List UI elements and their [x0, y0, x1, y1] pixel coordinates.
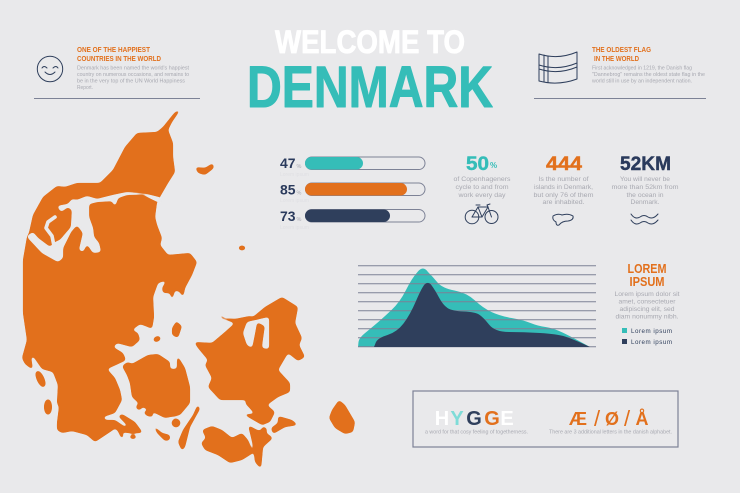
Anholt	[238, 246, 246, 250]
icon: island	[553, 214, 573, 225]
caption: hygge: a word for that cosy feeling of togetherness.	[425, 430, 528, 436]
number: 444: 444	[546, 154, 582, 175]
danish letters: Å	[636, 409, 648, 429]
bar: 47 percent	[280, 155, 425, 178]
word: hygge: Y	[450, 408, 464, 430]
heading: oldest flag: THE OLDEST FLAG	[592, 45, 651, 54]
progress bars	[280, 155, 425, 231]
Mon	[271, 416, 298, 434]
heading: oldest flag: IN THE WORLD	[594, 54, 639, 63]
panel: happiest countries	[34, 45, 200, 98]
stat: islands	[534, 154, 594, 225]
bar: 85 percent: 85	[280, 182, 296, 198]
panel: oldest flag	[534, 45, 706, 98]
small island Lyo	[129, 435, 137, 439]
navy area	[374, 283, 590, 347]
text block: lorem ipsum: adipiscing elit, sed	[620, 306, 675, 313]
title line: welcome to: WELCOME TO	[275, 24, 465, 60]
teal area	[358, 268, 590, 347]
danish letters: Ø	[605, 409, 619, 429]
heading: happiest countries: ONE OF THE HAPPIEST	[77, 45, 150, 54]
Limfjord branch	[46, 217, 55, 246]
icon: danish flag	[539, 52, 577, 83]
text block: islands: are inhabited.	[542, 199, 585, 206]
text block: happiest countries: Report.	[77, 85, 93, 91]
text block: cyclists: work every day	[457, 192, 507, 199]
danish letters: /	[594, 406, 601, 431]
Falster	[248, 425, 273, 469]
small island Taasinge	[172, 418, 180, 428]
landmass shapes	[22, 109, 355, 469]
chart legend panel	[614, 261, 680, 346]
Fano	[33, 369, 48, 389]
bar: 85 percent: Lorem ipsum	[280, 198, 309, 204]
bar: 73 percent: %	[296, 217, 302, 223]
danish letters: Æ	[569, 409, 587, 429]
text block: cyclists: of Copenhageners	[454, 176, 510, 183]
heading: happiest countries: COUNTRIES IN THE WORLD	[77, 54, 161, 63]
Samso	[172, 313, 182, 338]
text block: lorem ipsum: Lorem ipsum dolor sit	[614, 291, 680, 298]
Lolland	[201, 426, 253, 463]
text block: distance to ocean: Denmark.	[630, 199, 660, 206]
bar: 73 percent: 73	[280, 208, 296, 224]
bar: 47 percent: Lorem ipsum	[280, 172, 309, 178]
Zealand	[194, 297, 305, 425]
small island south-west of Funen	[143, 410, 153, 417]
stat: distance to ocean	[612, 154, 678, 224]
Bornholm	[329, 400, 355, 434]
heading: lorem ipsum: IPSUM	[630, 274, 664, 289]
text block: distance to ocean: the ocean in	[626, 192, 664, 199]
caption: danish letters: There are 3 additional letters in the danish alphabet.	[549, 430, 672, 436]
bar: 73 percent: Lorem ipsum	[280, 225, 309, 231]
danish letters: /	[624, 406, 631, 431]
title line: denmark: DENMARK	[247, 55, 493, 120]
number: 50 percent: 50	[466, 154, 489, 175]
word: hygge: G	[484, 408, 500, 430]
legend item: navy: Lorem ipsum	[631, 339, 672, 346]
Aero	[152, 424, 170, 441]
legend item: teal: Lorem ipsum	[631, 328, 672, 335]
text block: lorem ipsum: amet, consectetuer	[618, 298, 676, 306]
text block: happiest countries: Denmark has been named the world's happiest	[77, 66, 190, 72]
title	[247, 24, 493, 120]
Jutland	[22, 109, 197, 442]
Isefjord	[243, 317, 269, 349]
text block: oldest flag: "Dannebrog" remains the oldest state flag in the	[592, 72, 705, 78]
inland waters	[27, 192, 269, 349]
Limfjord	[27, 192, 162, 262]
text block: distance to ocean: You will never be	[620, 176, 671, 183]
word: hygge: H	[435, 408, 449, 430]
text block: oldest flag: world still in use by an independent nation.	[592, 78, 692, 84]
bar: 85 percent	[280, 182, 425, 204]
percent sign: %	[490, 161, 497, 170]
Romo	[44, 399, 52, 415]
text block: islands: Is the number of	[538, 176, 589, 183]
stat: cyclists	[454, 154, 510, 224]
Laeso	[195, 163, 214, 175]
Langeland	[178, 404, 200, 451]
map of Denmark	[22, 109, 355, 469]
word: hygge: G	[466, 408, 482, 430]
bar: 85 percent: %	[296, 190, 302, 196]
area chart	[358, 266, 596, 347]
icon: waves	[631, 214, 658, 224]
small island east Jutland	[152, 335, 162, 343]
icon: bicycle	[465, 204, 498, 224]
text block: happiest countries: be in the very top of the UN World Happiness	[77, 78, 185, 84]
Funen	[122, 354, 190, 418]
heading: lorem ipsum: LOREM	[628, 261, 666, 276]
text block: happiest countries: country on numerous occasions, and remains to	[77, 72, 189, 78]
bar: 73 percent	[280, 208, 425, 231]
text block: islands: islands in Denmark,	[534, 184, 593, 191]
text block: cyclists: cycle to and from	[456, 184, 508, 191]
bar: 47 percent: 47	[280, 155, 296, 171]
text block: oldest flag: First acknowledged in 1219, the Danish flag	[592, 66, 692, 72]
small island south of Funen	[136, 404, 142, 410]
text block: lorem ipsum: diam nonummy nibh.	[616, 314, 679, 320]
panel: hygge and alphabet	[413, 391, 678, 447]
text block: islands: but only 76 of them	[534, 192, 594, 199]
word: hygge: E	[500, 408, 514, 430]
text block: distance to ocean: more than 52km from	[612, 184, 678, 191]
small island Smaland	[261, 427, 267, 433]
number: 52km: 52KM	[620, 154, 671, 175]
bar: 47 percent: %	[296, 164, 302, 170]
icon: smiling face	[37, 56, 63, 82]
